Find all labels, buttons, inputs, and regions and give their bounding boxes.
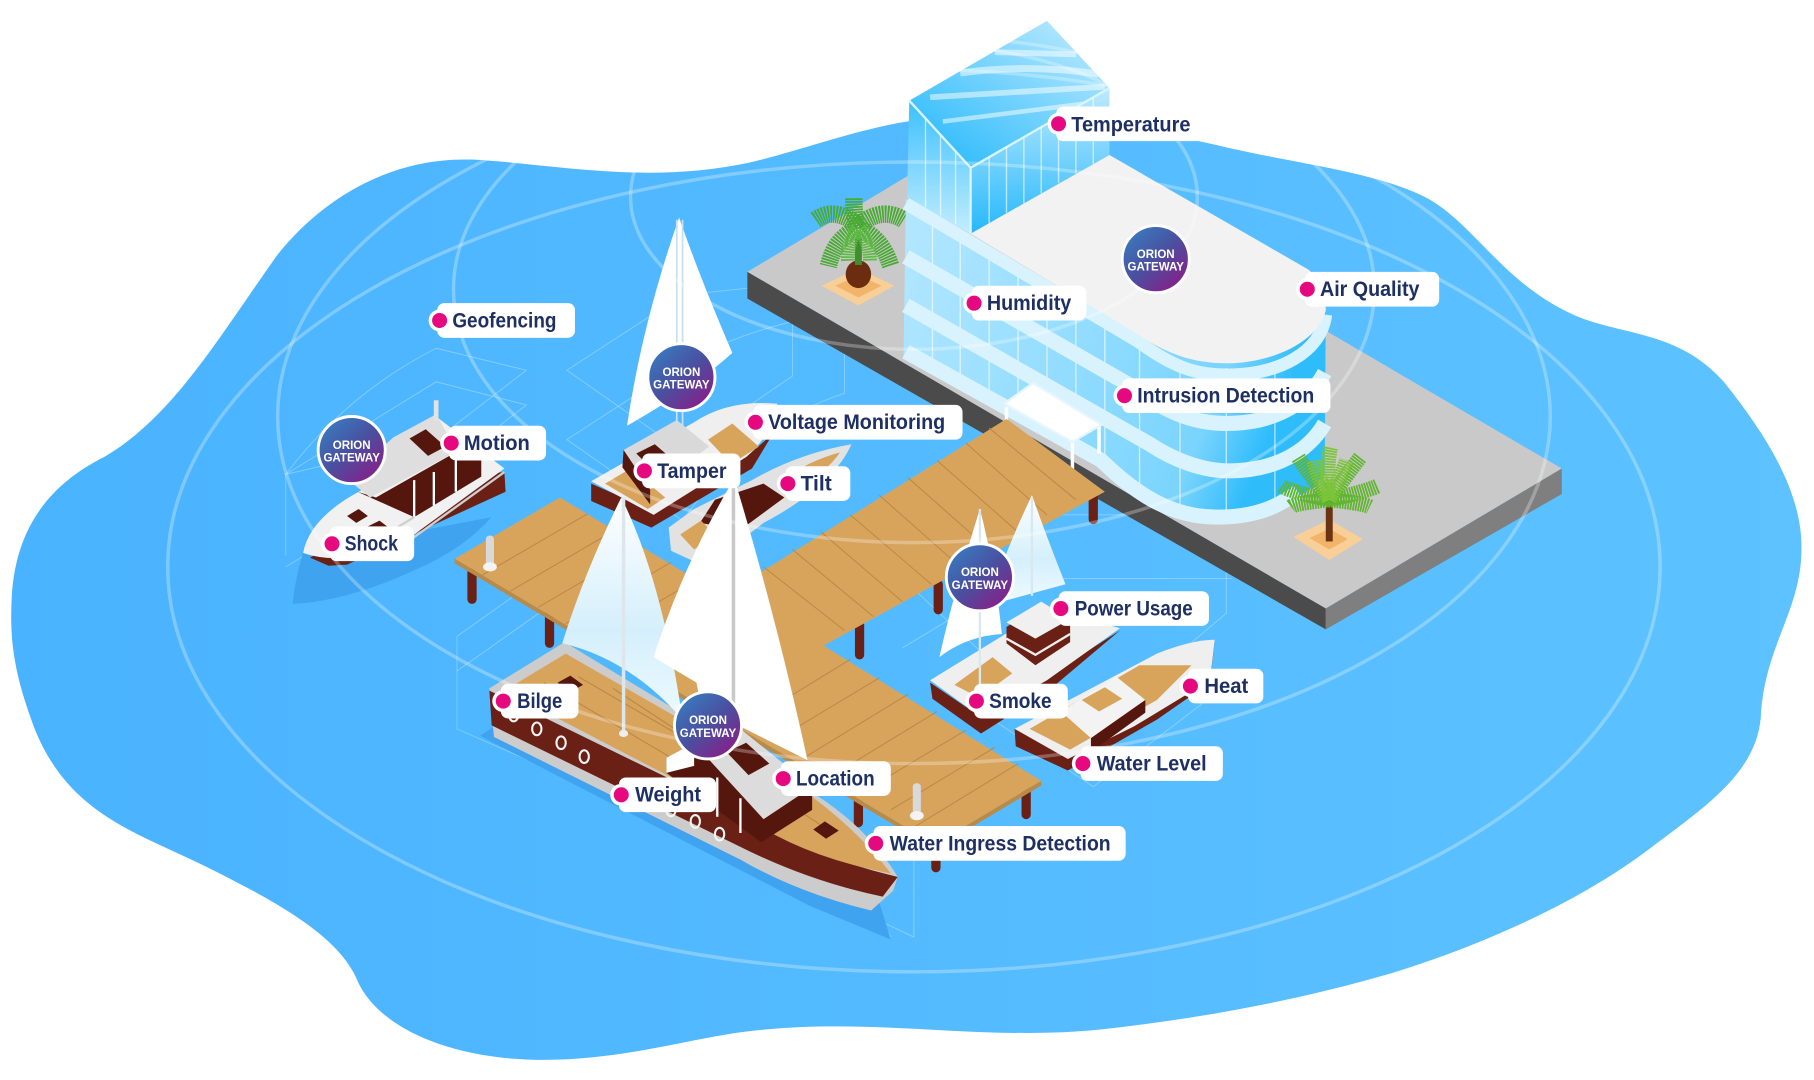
gateway badge: large sailboat: GATEWAY [680, 728, 737, 740]
gateway badge: voltage boat: ORION [662, 367, 700, 379]
mooring posts [483, 536, 924, 820]
blueprint wireframe lines [286, 283, 1232, 937]
label: Weight: Weight [635, 783, 701, 807]
gateway badge: building: GATEWAY [1127, 262, 1184, 274]
label: Voltage Monitoring: Voltage Monitoring [768, 410, 945, 434]
office building [904, 21, 1326, 517]
label: Smoke [965, 684, 1068, 718]
label: Tamper [633, 454, 740, 488]
label: Voltage Monitoring [744, 405, 963, 440]
gateway badge: right boats [946, 544, 1013, 611]
label: Weight [610, 777, 716, 812]
label: Smoke: Smoke [989, 689, 1052, 713]
tower [907, 21, 1109, 234]
gateway badge: left yacht: GATEWAY [323, 453, 380, 465]
roof deck [971, 155, 1326, 363]
sailboat large [480, 480, 898, 939]
label: Humidity [963, 286, 1086, 320]
label: Bilge [492, 684, 578, 718]
label: Power Usage: Power Usage [1075, 596, 1193, 620]
gateway badge: voltage boat: GATEWAY [653, 380, 710, 392]
entrance canopy roof [1004, 383, 1101, 442]
label: Water Level [1072, 746, 1223, 781]
palm tree right [1282, 448, 1378, 560]
gateway badge: right boats: GATEWAY [952, 580, 1008, 592]
dock planks [482, 428, 1076, 827]
label: Humidity: Humidity [987, 291, 1071, 315]
building platform [747, 131, 1562, 629]
label: Shock [321, 526, 414, 561]
gateway badge: left yacht: ORION [333, 440, 371, 452]
label: Air Quality: Air Quality [1320, 277, 1420, 301]
label: Bilge: Bilge [517, 689, 562, 713]
label: Intrusion Detection [1114, 378, 1330, 413]
label: Location [772, 761, 891, 796]
gateway badge: large sailboat: ORION [689, 715, 727, 727]
gateway badge: building: ORION [1137, 249, 1175, 261]
label: Tilt [777, 466, 850, 501]
power usage boat [930, 495, 1120, 733]
gateway badge: right boats: ORION [961, 567, 999, 579]
sailboat top [591, 218, 777, 528]
label: Water Ingress Detection: Water Ingress Detection [890, 831, 1111, 855]
wooden dock [455, 419, 1105, 868]
water ripple rings [168, 36, 1660, 972]
heat boat [1015, 640, 1215, 771]
gateway badge: large sailboat [674, 692, 742, 759]
gateway badge: left yacht [318, 417, 385, 484]
label: Geofencing: Geofencing [452, 308, 556, 332]
motor yacht left [293, 400, 506, 604]
palm tree left [816, 198, 904, 305]
gateway badge: voltage boat [648, 344, 715, 411]
label: Heat: Heat [1204, 674, 1248, 698]
gateway badge: building [1122, 226, 1189, 293]
label: Air Quality [1296, 272, 1439, 307]
label: Temperature: Temperature [1071, 112, 1191, 136]
label: Motion: Motion [464, 431, 530, 455]
label: Water Ingress Detection [865, 826, 1126, 861]
entrance canopy [1006, 407, 1099, 482]
label: Shock: Shock [345, 532, 398, 556]
label: Power Usage [1050, 591, 1209, 626]
label: Water Level: Water Level [1097, 752, 1207, 776]
floor bands [906, 204, 1326, 517]
label: Motion [440, 426, 546, 460]
label: Location: Location [796, 767, 875, 791]
dock legs [472, 492, 1093, 868]
label: Temperature [1048, 106, 1205, 141]
portholes [509, 709, 724, 841]
glass body [904, 199, 1326, 517]
sailboat tilt [669, 444, 851, 567]
label: Tamper: Tamper [657, 459, 727, 483]
label: Tilt: Tilt [801, 472, 832, 496]
label: Geofencing [429, 303, 575, 338]
label: Intrusion Detection: Intrusion Detection [1137, 384, 1314, 408]
label: Heat [1179, 669, 1263, 703]
